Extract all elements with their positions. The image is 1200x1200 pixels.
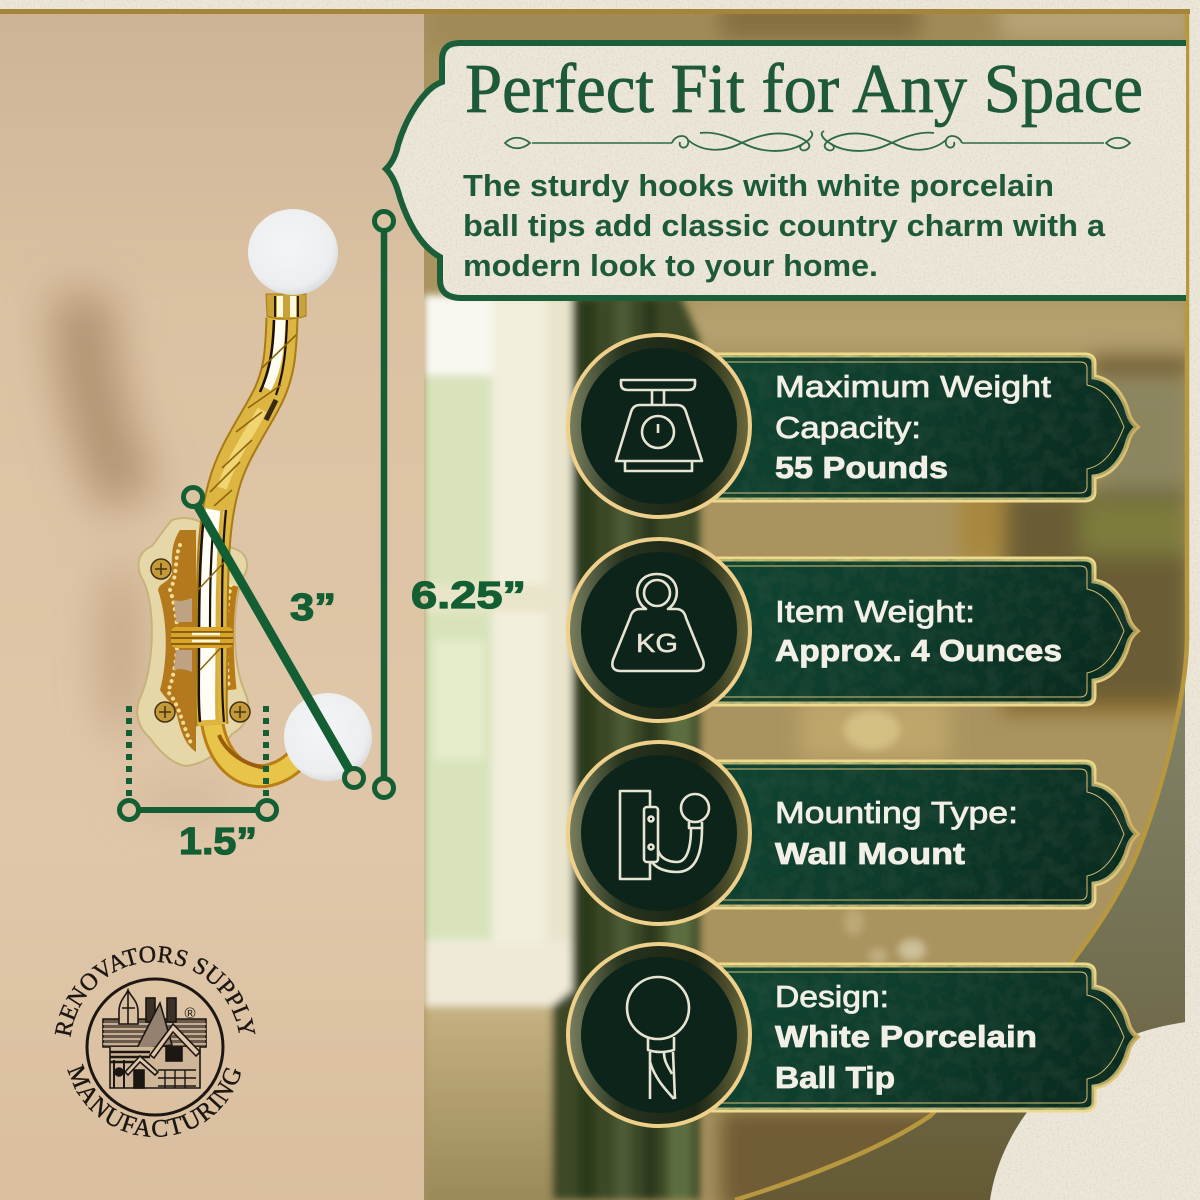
icon: KG weight: KG (636, 628, 678, 658)
mounting screws (151, 559, 250, 722)
capacity text: Capacity: (775, 410, 921, 445)
description text (463, 168, 1106, 283)
brand logo: Renovators Supply Manufacturing: ® (184, 1005, 196, 1022)
bottom porcelain ball (284, 693, 372, 781)
hook product photo (84, 209, 372, 814)
mounting plate (137, 518, 250, 766)
ribbon (700, 355, 1137, 500)
label: 3 inch: 3” (290, 587, 336, 629)
badge circle (568, 742, 750, 924)
ribbon (700, 559, 1137, 704)
background: room photo with window and curtain (424, 0, 1190, 1200)
design text: Ball Tip (775, 1060, 895, 1095)
ornament divider (505, 131, 1130, 151)
item weight text (775, 594, 1062, 668)
brand logo: Renovators Supply Manufacturing (54, 946, 256, 1138)
mounting type text: Mounting Type: (775, 795, 1018, 830)
panel: item weight (568, 539, 1137, 721)
capacity text: 55 Pounds (775, 450, 948, 485)
icon: wall mounted hook (620, 791, 709, 879)
description text: modern look to your home. (463, 248, 878, 283)
design text: Design: (775, 979, 889, 1014)
badge circle (568, 539, 750, 721)
heading: Perfect Fit for Any Space (465, 51, 1143, 128)
brand logo: Renovators Supply Manufacturing: RENOVATORS SUPPLY (54, 946, 256, 1038)
capacity text: Maximum Weight (775, 369, 1051, 404)
design text: White Porcelain (775, 1019, 1037, 1054)
polished highlights (266, 320, 280, 388)
design text (775, 979, 1037, 1095)
decorative band (171, 627, 233, 648)
ribbon (700, 762, 1137, 907)
badge circle (568, 335, 750, 517)
mounting type text: Wall Mount (775, 836, 965, 871)
ribbon (700, 965, 1137, 1110)
window frame and curtain (424, 295, 700, 1200)
item weight text: Approx. 4 Ounces (775, 633, 1062, 668)
logo house drawing (103, 990, 206, 1088)
bottom-right paper corner (990, 1022, 1200, 1200)
top porcelain ball (248, 209, 338, 295)
dimension: width 1.5 inch (120, 706, 276, 820)
icon: KG weight (612, 574, 704, 671)
hook collar (266, 294, 306, 319)
icon: kitchen scale (616, 380, 702, 471)
item weight text: Item Weight: (775, 594, 975, 629)
wall outside the arched mirror (744, 688, 1185, 1200)
mounting type text (775, 795, 1018, 871)
description text: ball tips add classic country charm with a (463, 208, 1106, 243)
hook shadows (84, 295, 245, 814)
panel: mounting type (568, 742, 1137, 924)
capacity text (775, 369, 1051, 485)
panel: design (568, 944, 1137, 1126)
brand logo: Renovators Supply Manufacturing: MANUFACTURING (67, 1064, 241, 1138)
hook arm (198, 318, 296, 776)
description text: The sturdy hooks with white porcelain (463, 168, 1054, 203)
panel: maximum weight capacity (568, 335, 1137, 517)
dimension: projection 3 inch (184, 488, 364, 788)
dimension: height 6.25 inch (374, 212, 394, 798)
label: 6.25 inch: 6.25” (411, 575, 526, 617)
header card border (386, 43, 1186, 298)
label: 1.5 inch: 1.5” (179, 821, 257, 863)
wall panel (0, 14, 424, 1200)
icon: porcelain ball tip (627, 977, 689, 1099)
panel: header card (386, 43, 1186, 298)
badge circle (568, 944, 750, 1126)
